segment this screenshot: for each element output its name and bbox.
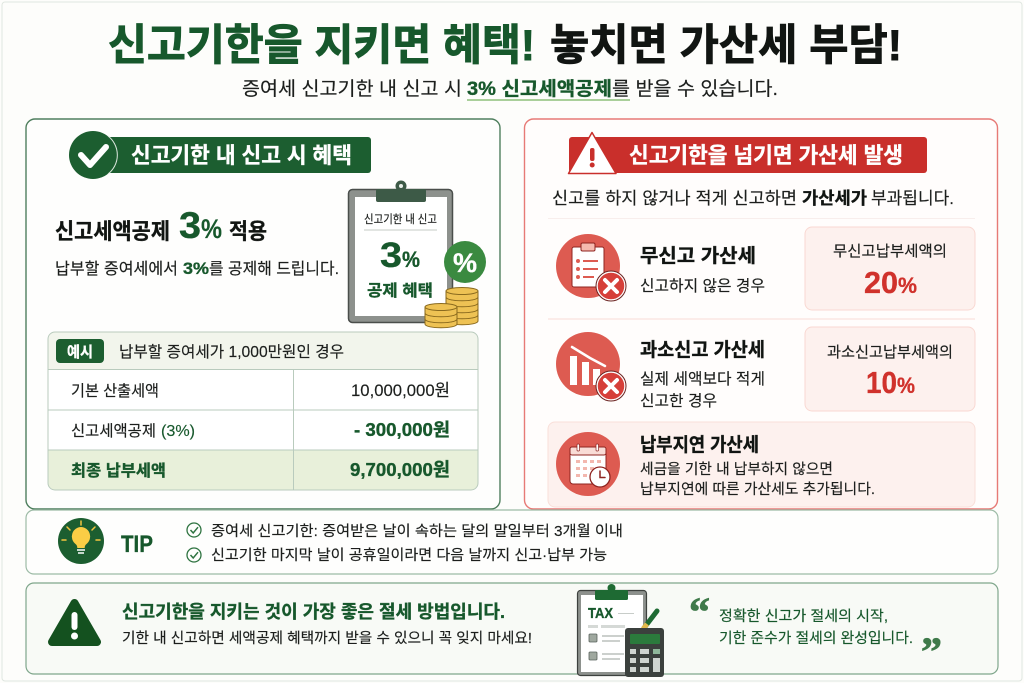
row: base tax <box>71 381 450 400</box>
under-reporting penalty text <box>640 339 765 410</box>
quote <box>689 589 942 674</box>
tip item 1: 증여세 신고기한: 증여받은 날이 속하는 달의 말일부터 3개월 이내 <box>211 523 623 540</box>
no-filing penalty text: 신고하지 않은 경우 <box>640 277 765 295</box>
penalties intro text: 부과됩니다. <box>871 189 954 208</box>
callout: under-reporting 10%: 10 <box>866 365 897 400</box>
row: deduction <box>71 420 450 440</box>
icon: falling chart with x <box>556 332 626 401</box>
deduction heading: % <box>201 214 222 244</box>
subtitle: 3% 신고세액공제 <box>467 78 612 100</box>
no-filing penalty text <box>640 245 765 295</box>
panel: benefits within deadline <box>26 119 500 509</box>
subtitle <box>242 78 778 101</box>
callout: under-reporting 10%: 과소신고납부세액의 <box>827 344 953 361</box>
callout: under-reporting 10% <box>805 327 975 411</box>
icon: tax clipboard and calculator: TAX <box>588 605 613 622</box>
callout: no-filing 20%: % <box>898 273 917 298</box>
no-filing penalty text: 무신고 가산세 <box>640 245 756 267</box>
icon: warning triangle <box>52 603 97 642</box>
icon: clipboard with x <box>556 234 626 301</box>
row: base tax: 기본 산출세액 <box>71 382 159 400</box>
panel: closing message <box>26 583 998 677</box>
title <box>108 22 902 70</box>
icon: clipboard with 3% benefit: % <box>402 247 420 272</box>
icon: gold coins <box>425 288 478 328</box>
subtitle: 를 받을 수 있습니다. <box>612 78 778 100</box>
benefits header banner <box>69 131 371 179</box>
title: 놓치면 가산세 부담! <box>550 22 902 70</box>
callout: no-filing 20% <box>805 227 975 310</box>
icon: percent badge: % <box>453 248 477 278</box>
penalties header banner: 신고기한을 넘기면 가산세 발생 <box>629 143 903 168</box>
quote: 정확한 신고가 절세의 시작, <box>719 608 888 625</box>
late-payment penalty text: 납부지연 가산세 <box>640 434 759 456</box>
example table <box>48 332 478 490</box>
icon: clipboard with 3% benefit <box>348 180 452 322</box>
closing message text: 신고기한을 지키는 것이 가장 좋은 절세 방법입니다. <box>122 602 505 622</box>
under-reporting penalty text: 신고한 경우 <box>640 392 717 410</box>
row: deduction: (3%) <box>161 423 195 440</box>
example badge <box>56 339 104 363</box>
row: deduction: - 300,000원 <box>354 420 450 440</box>
icon: clipboard with 3% benefit: 신고기한 내 신고 <box>364 213 437 226</box>
penalties intro text <box>552 189 954 208</box>
tip label: TIP <box>121 531 153 558</box>
row: final tax <box>71 459 450 480</box>
under-reporting penalty text: 과소신고 가산세 <box>640 339 765 361</box>
penalties intro text: 가산세가 <box>802 189 867 208</box>
subtitle: 증여세 신고기한 내 신고 시 <box>242 78 462 100</box>
example badge: 예시 <box>67 344 93 361</box>
late-payment penalty text: 세금을 기한 내 납부하지 않으면 <box>640 461 833 478</box>
penalties intro text: 신고를 하지 않거나 적게 신고하면 <box>552 189 797 208</box>
late-payment penalty text: 납부지연에 따른 가산세도 추가됩니다. <box>640 481 875 498</box>
example case text: 납부할 증여세가 1,000만원인 경우 <box>119 343 344 361</box>
panel: penalties after deadline <box>524 119 998 509</box>
row: base tax: 10,000,000원 <box>351 381 450 400</box>
icon: calendar with clock <box>556 432 620 496</box>
deduction description: 납부할 증여세에서 <box>55 260 178 278</box>
deduction description <box>55 259 339 278</box>
late-payment penalty box <box>548 422 975 507</box>
closing message text: 기한 내 신고하면 세액공제 혜택까지 받을 수 있으니 꼭 잊지 마세요! <box>122 630 532 647</box>
icon: light bulb <box>58 518 104 564</box>
closing message text <box>122 602 532 647</box>
callout: under-reporting 10%: % <box>897 373 915 398</box>
tip item 2: 신고기한 마지막 날이 공휴일이라면 다음 날까지 신고·납부 가능 <box>211 547 607 564</box>
callout: no-filing 20%: 20 <box>864 265 898 300</box>
row: final tax: 최종 납부세액 <box>71 462 166 480</box>
title: 신고기한을 지키면 혜택! <box>108 22 535 70</box>
deduction heading: 3 <box>179 205 201 246</box>
icon: clipboard with 3% benefit: 3 <box>380 236 402 275</box>
callout: no-filing 20%: 무신고납부세액의 <box>833 243 947 260</box>
penalties header banner <box>568 132 927 174</box>
benefits header banner: 신고기한 내 신고 시 혜택 <box>131 143 352 168</box>
late-payment penalty text <box>640 434 875 498</box>
quote: ” <box>921 629 942 674</box>
deduction heading <box>55 205 267 246</box>
quote: “ <box>689 589 710 634</box>
icon: tax clipboard and calculator <box>578 584 664 677</box>
deduction heading: 적용 <box>229 219 267 244</box>
quote: 기한 준수가 절세의 완성입니다. <box>719 630 913 647</box>
row: deduction: 신고세액공제 <box>71 422 156 440</box>
icon: percent badge <box>444 241 486 283</box>
deduction heading: 신고세액공제 <box>55 219 170 244</box>
panel: tip <box>26 510 998 574</box>
deduction description: 3% <box>183 259 209 278</box>
deduction description: 를 공제해 드립니다. <box>209 260 339 278</box>
under-reporting penalty text: 실제 세액보다 적게 <box>640 370 765 388</box>
row: final tax: 9,700,000원 <box>350 459 450 480</box>
icon: clipboard with 3% benefit: 공제 혜택 <box>367 282 433 300</box>
